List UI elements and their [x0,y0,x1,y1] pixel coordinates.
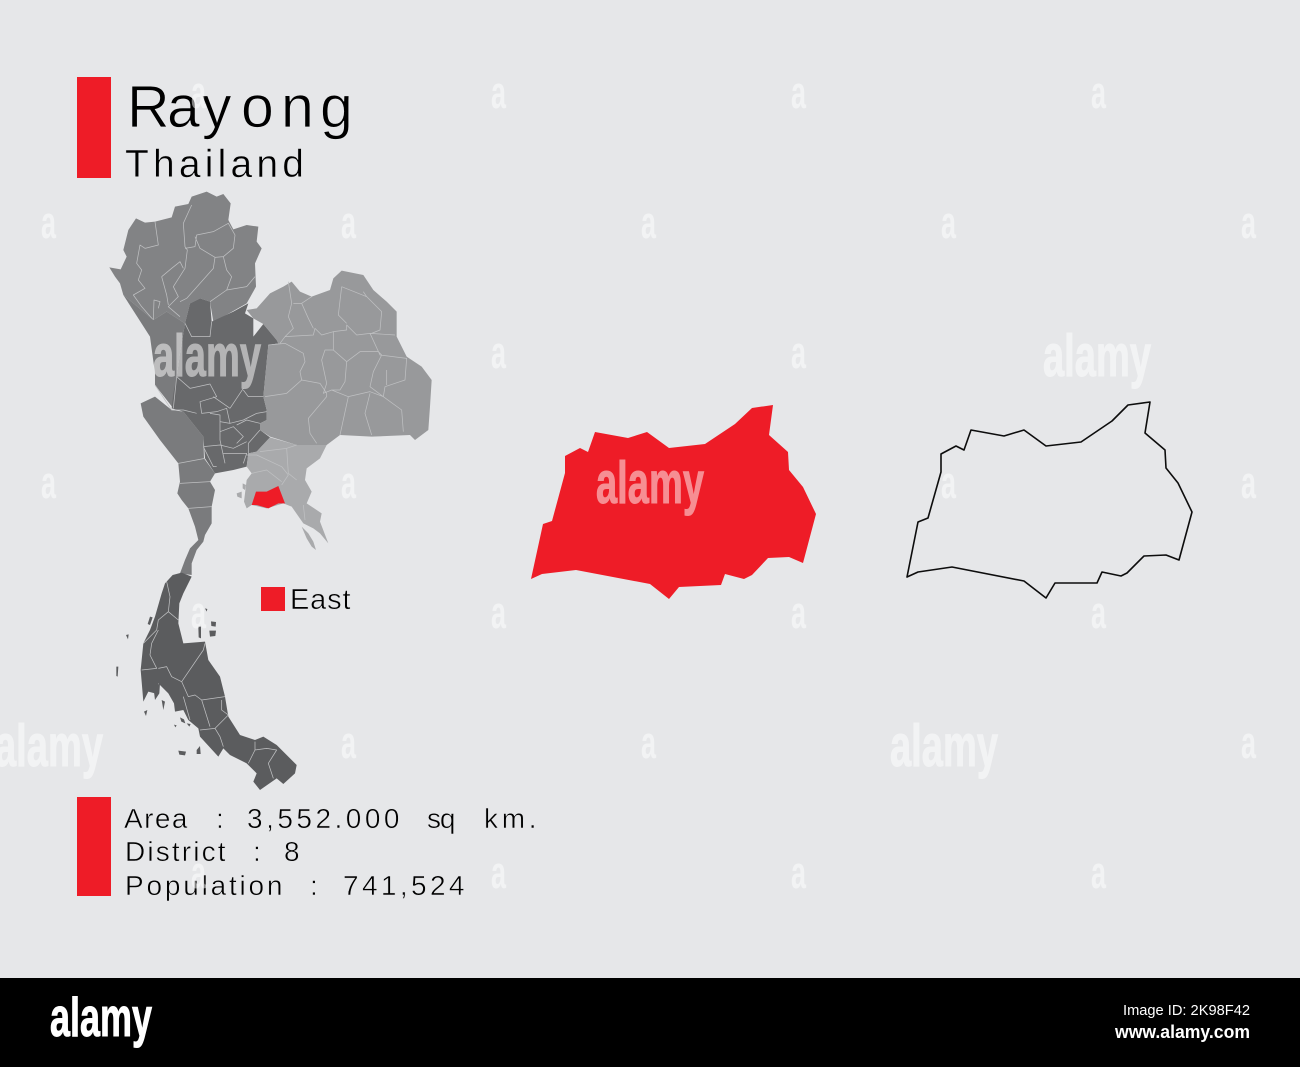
watermark pattern: a [491,327,507,378]
watermark pattern: a [791,67,807,118]
watermark pattern: a [191,67,207,118]
map: Thailand by region [109,192,432,790]
image id: Image ID: 2K98F42 [1123,1002,1250,1019]
legend label: East [290,584,353,616]
watermark pattern: a [1241,457,1257,508]
watermark pattern: alamy [596,450,704,516]
Rayong filled shape [531,405,816,599]
watermark pattern: a [341,717,357,768]
watermark pattern: alamy [153,323,261,389]
watermark pattern: a [341,457,357,508]
stat: population: 741,524 [343,870,467,901]
subtitle: Thailand: Thailand [125,143,304,186]
stat: area: 3,552.000 [247,803,402,834]
watermark pattern: a [491,587,507,638]
watermark pattern: a [41,457,57,508]
watermark pattern: a [791,847,807,898]
title: Rayong: Rayong [127,74,353,140]
stat: area: sq [427,803,458,834]
stat: area: : [216,803,226,834]
footer logo: alamy [50,986,152,1048]
region: northeast [247,271,432,445]
region: north [109,192,262,323]
watermark pattern: a [41,197,57,248]
watermark pattern: alamy [890,713,998,779]
watermark pattern: a [641,197,657,248]
website: www.alamy.com [1114,1022,1250,1042]
watermark pattern: a [1241,717,1257,768]
stat: population: Population [125,870,285,901]
watermark pattern: a [1091,67,1107,118]
stat: area [124,803,539,834]
watermark pattern: a [941,197,957,248]
region: central [155,298,278,473]
stat: population: : [310,870,320,901]
stat: district: : [253,836,263,867]
watermark pattern: a [1091,587,1107,638]
region: Rayong highlighted on map [252,486,285,508]
region: east [237,437,328,550]
watermark pattern: a [791,327,807,378]
watermark pattern: a [491,67,507,118]
stat: population [125,870,467,901]
region: south [116,573,297,790]
watermark pattern: a [191,847,207,898]
watermark pattern: a [191,587,207,638]
Rayong outline shape [907,402,1192,598]
stat: area: km. [484,803,539,834]
footer bar [0,978,1300,1067]
watermark pattern [0,67,1257,898]
stat: district [125,836,302,867]
watermark pattern: alamy [1043,323,1151,389]
watermark pattern: a [791,587,807,638]
watermark pattern: a [341,197,357,248]
region: west [123,295,215,575]
stat: area: Area [124,803,190,834]
legend: East [261,584,353,616]
stat: district: District [125,836,228,867]
watermark pattern: a [641,717,657,768]
watermark pattern: a [941,457,957,508]
stats text block [124,803,539,901]
watermark pattern: a [1241,197,1257,248]
stats accent bar [77,797,111,896]
watermark pattern: a [491,847,507,898]
watermark pattern: alamy [0,713,103,779]
title accent bar [77,77,111,178]
stat: district: 8 [284,836,302,867]
watermark pattern: a [1091,847,1107,898]
legend swatch [261,587,285,611]
